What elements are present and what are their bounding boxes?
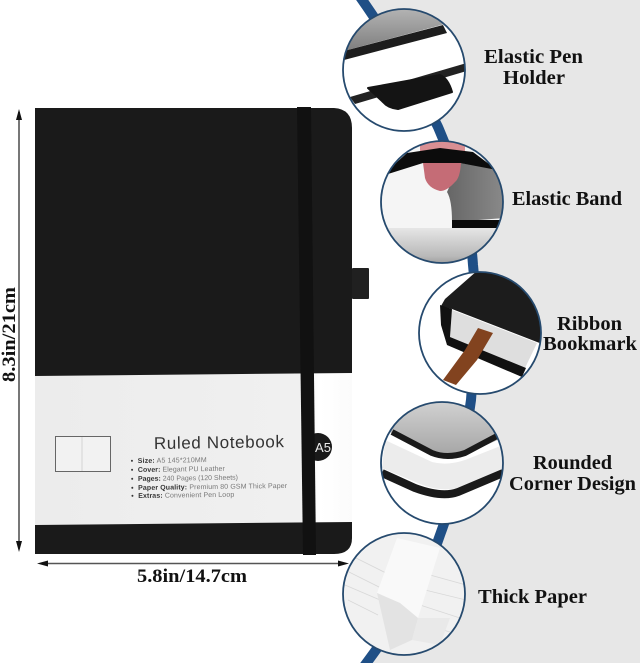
blue curved line xyxy=(358,0,475,663)
spec list: Size: A5 145*210MM xyxy=(138,457,207,465)
spec list: • xyxy=(131,476,134,483)
label: rounded corner design: Corner Design xyxy=(509,473,637,495)
circle: rounded corner design xyxy=(378,398,508,528)
notebook cover xyxy=(35,108,352,554)
label: ribbon bookmark: Ribbon xyxy=(557,313,623,335)
label: rounded corner design: Rounded xyxy=(533,452,613,474)
label: elastic pen holder: Holder xyxy=(503,67,565,89)
spec list: Pages: 240 Pages (120 Sheets) xyxy=(138,475,238,483)
spec list: Paper Quality: Premium 80 GSM Thick Paper xyxy=(138,483,288,492)
open notebook diagram xyxy=(56,436,110,472)
circle: thick paper xyxy=(340,530,470,660)
circle: elastic band xyxy=(378,138,508,268)
A5 badge: A5 xyxy=(315,440,331,455)
spec list: Cover: Elegant PU Leather xyxy=(138,466,226,474)
elastic band xyxy=(297,107,316,555)
spec list: Extras: Convenient Pen Loop xyxy=(138,492,234,500)
spec list: • xyxy=(131,493,134,500)
label: elastic pen holder xyxy=(484,46,584,89)
label: ribbon bookmark xyxy=(543,313,638,355)
label: rounded corner design xyxy=(509,452,637,495)
belly title: Ruled Notebook xyxy=(154,432,285,453)
height arrow xyxy=(16,109,22,552)
paper belly band xyxy=(35,373,352,525)
label: ribbon bookmark: Bookmark xyxy=(543,333,638,355)
label: elastic pen holder: Elastic Pen xyxy=(484,46,584,68)
circle: elastic pen holder xyxy=(340,5,470,135)
A5 badge xyxy=(304,433,332,461)
spec list: • xyxy=(131,485,134,492)
width label: 5.8in/14.7cm xyxy=(137,566,247,587)
spec list: • xyxy=(131,458,134,465)
spec list: • xyxy=(131,467,134,474)
circle: ribbon bookmark xyxy=(415,268,545,398)
label: elastic band: Elastic Band xyxy=(512,188,623,210)
notebook xyxy=(35,107,369,555)
grey background panel xyxy=(358,0,640,663)
label: thick paper: Thick Paper xyxy=(478,586,587,608)
width arrow xyxy=(37,560,349,566)
pen loop xyxy=(352,268,369,299)
spec list xyxy=(131,456,288,500)
